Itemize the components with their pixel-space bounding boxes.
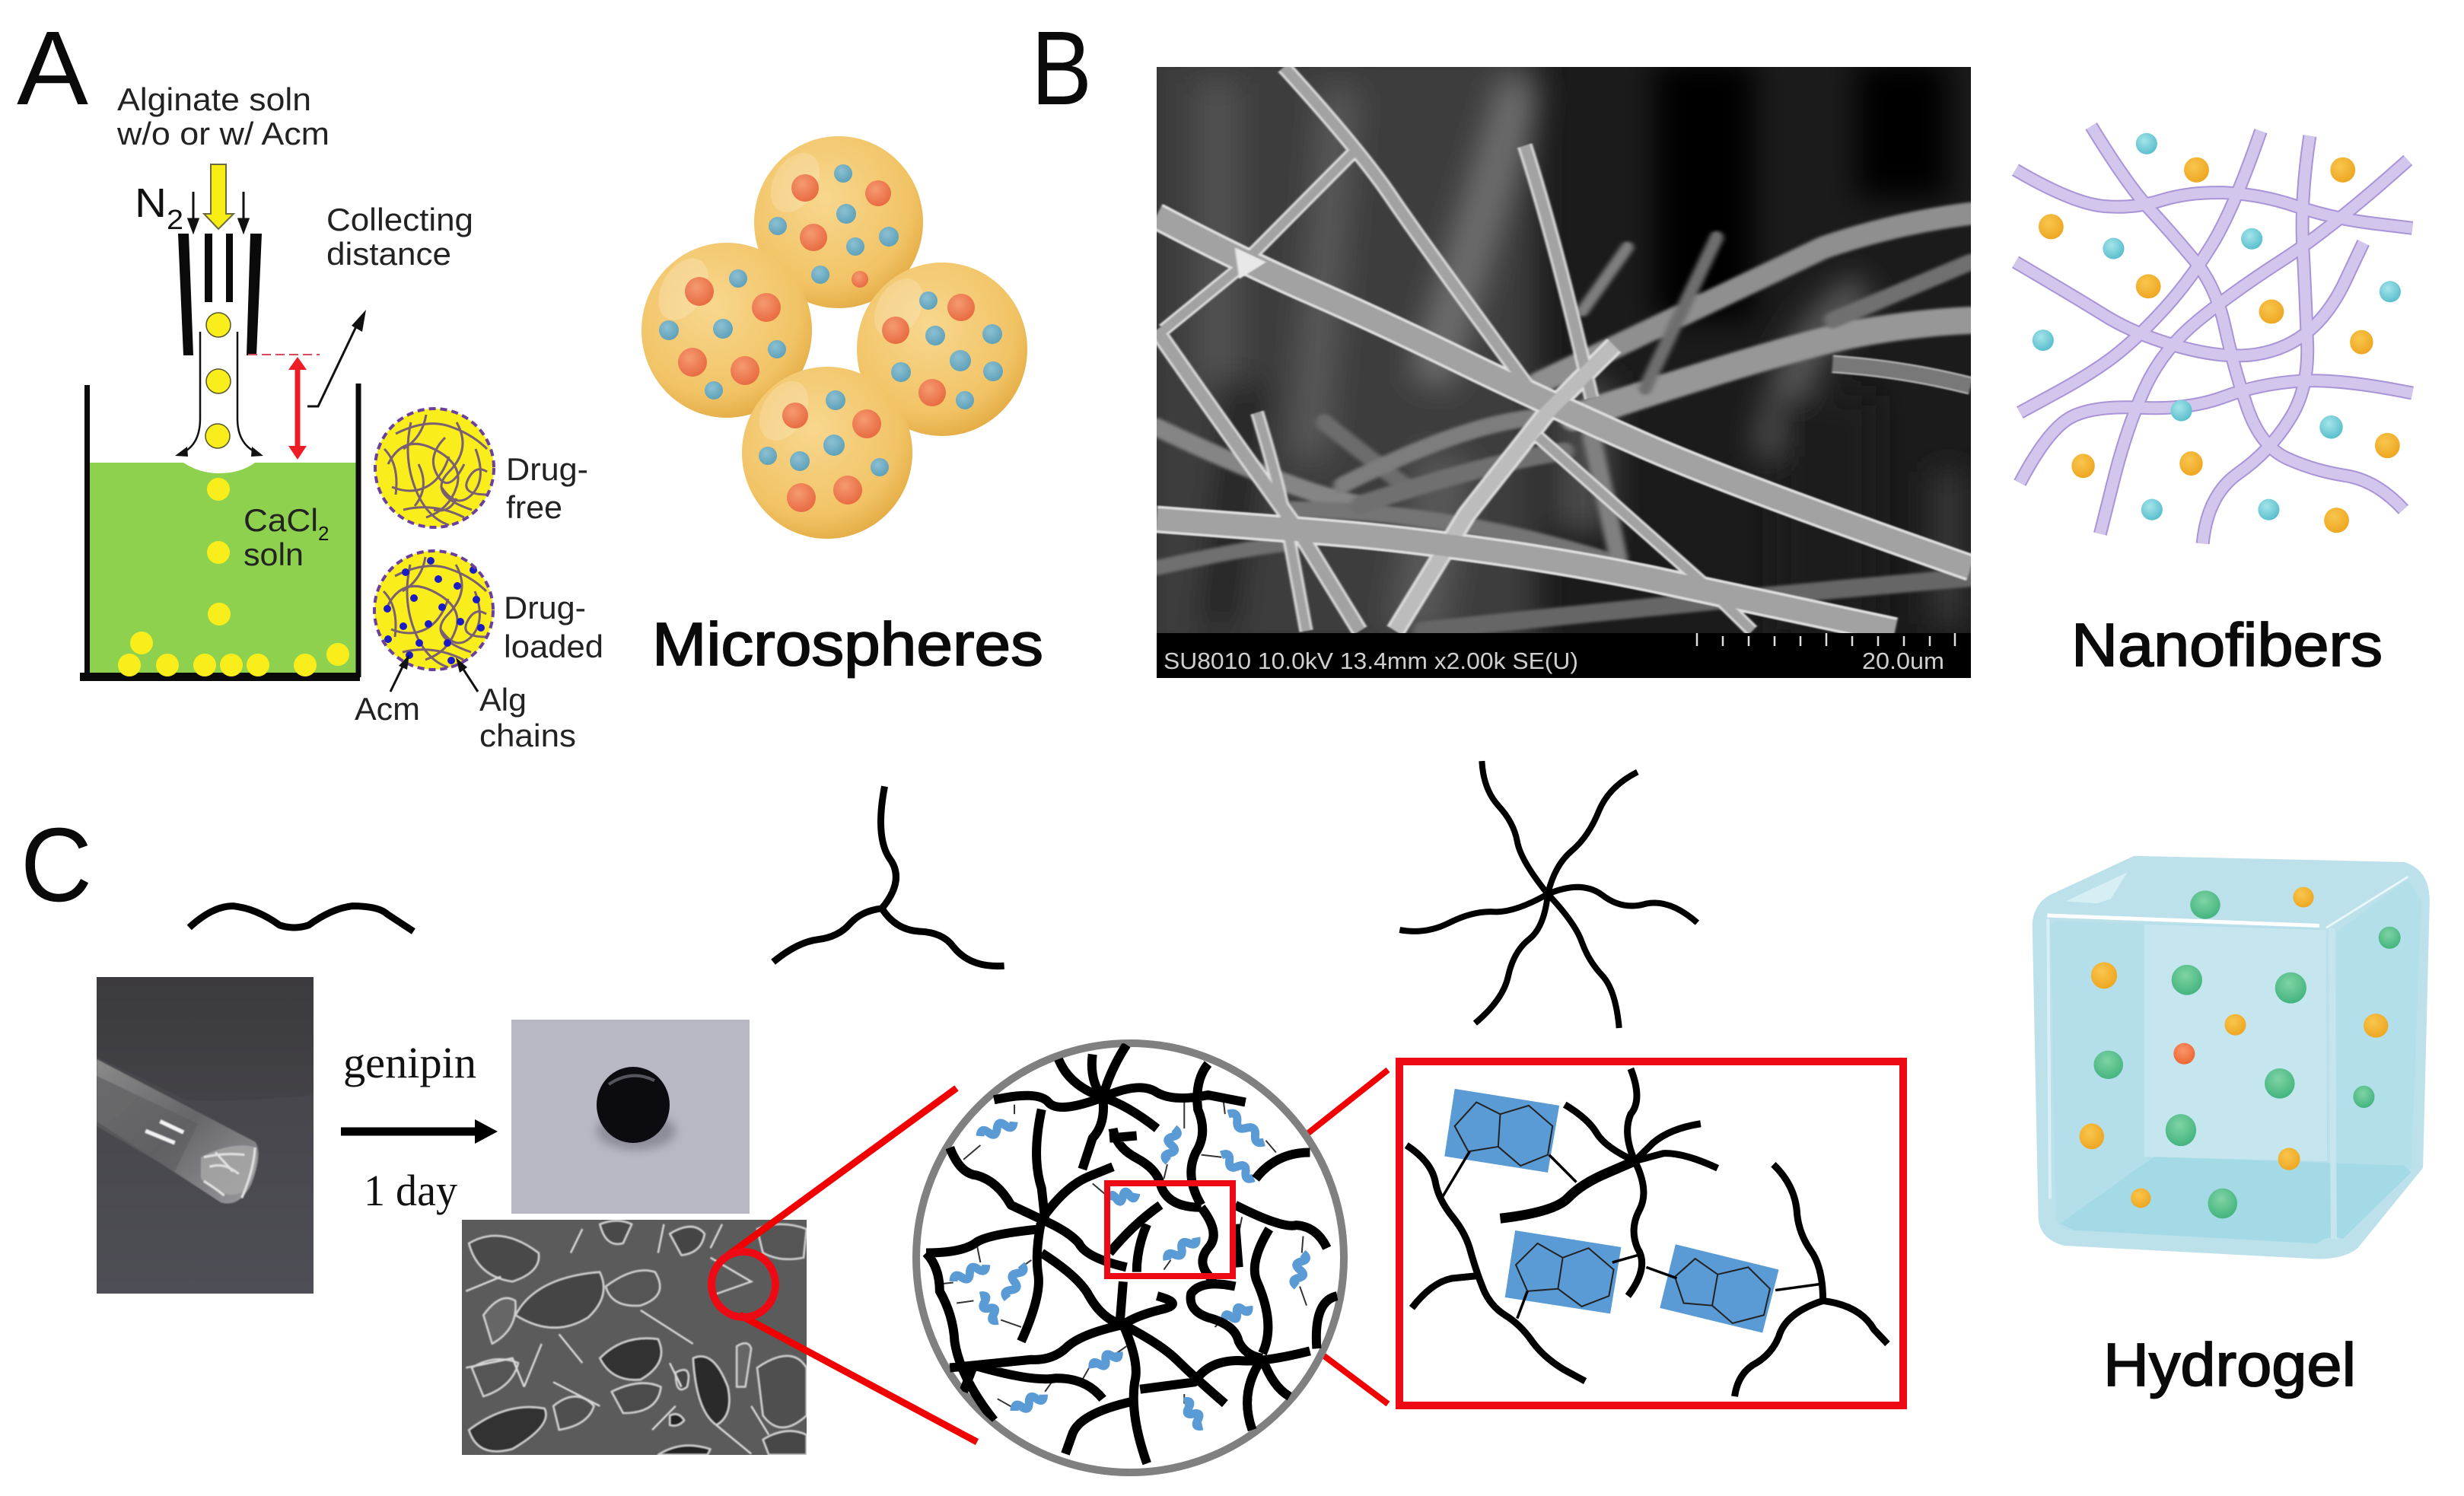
CaCl2 label: soln [244,536,304,572]
heading: Nanofibers: Nanofibers [2071,611,2383,679]
crosslinked polymer chains [926,1045,1337,1463]
red circle marker [712,1252,775,1317]
droplets in bath [118,478,349,676]
CaCl2 label: 2 [318,522,329,545]
reaction label: 1 day: 1 day [364,1166,457,1215]
CaCl2 label [244,502,329,572]
CaCl2 label: CaCl [244,502,318,538]
alginate solution label [116,81,329,151]
alginate solution label: Alginate soln [117,81,311,117]
detail box: crosslink close-up [1399,1062,1903,1405]
top sphere [754,136,923,308]
icon: linear chain [189,906,413,931]
drug-free label: free [506,489,562,525]
panel letter B: B [1031,10,1092,127]
nozzle [178,234,262,355]
N2 label: N [135,180,167,226]
drug-loaded label: loaded [504,629,603,664]
photo: dark gel bead [511,1020,750,1214]
panel letter C: C [21,807,92,924]
molecule 3 [1660,1244,1779,1333]
inset marker square [1107,1183,1233,1276]
crosslinks [1441,1151,1821,1319]
collecting distance label: Collecting [326,202,473,237]
alginate solution label: w/o or w/ Acm [116,116,329,151]
Acm label: Acm [355,691,420,727]
top face highlight [2066,872,2128,903]
drug-free label: Drug- [506,451,588,487]
drug squiggles [952,1111,1307,1428]
N2 label [135,180,183,235]
red double arrow [288,357,307,460]
air flow lines [175,332,263,457]
bottom sphere [742,367,912,539]
reaction label: genipin: genipin [343,1038,476,1087]
Alg chains label [479,682,576,753]
panel A: electrospray diagram [80,81,603,753]
edge highlights [2047,877,2408,1239]
network circle [916,1043,1344,1472]
heading: Hydrogel: Hydrogel [2103,1331,2356,1399]
panel C: polymer chain icons [189,761,1697,1028]
icon: six-arm chain [1399,761,1697,1028]
icon: drug-free sphere [375,409,494,527]
right sphere [857,263,1027,436]
nanofibers illustration [2015,126,2412,543]
Alg pointer [456,657,478,692]
icon: yellow feed arrow [204,164,234,229]
SEM micrograph of nanofibers [1141,46,1971,678]
Acm pointer [390,654,409,692]
collecting distance label: distance [326,236,451,272]
blurred background tones [1141,46,1948,654]
icon: drug-loaded sphere [374,551,493,670]
fibers [1157,67,1971,631]
drug-free label [506,451,588,525]
cube body [2033,856,2430,1259]
SEM info bar [1157,633,1971,678]
droplets [205,313,231,448]
fibers [2015,126,2412,543]
icon: three-arm chain [773,786,1004,966]
thin links [940,1097,1307,1408]
SEM info bar: 20.0um [1862,648,1944,674]
orange particles [2039,158,2400,533]
chains [1406,1068,1887,1396]
floor [2060,1157,2411,1243]
icon: nitrogen arrows [189,192,248,231]
SEM micrograph of hydrogel [462,1220,807,1455]
panel letter A: A [17,10,88,127]
drug-loaded label: Drug- [504,590,586,625]
hydrogel illustration [2033,856,2430,1259]
green particles [2093,890,2401,1218]
collecting distance label [326,202,473,272]
molecule 2 [1505,1230,1621,1313]
red particle [2173,1043,2195,1065]
molecule 1 [1444,1089,1559,1173]
beaker with CaCl2 solution [80,384,360,681]
Alg chains label: chains [479,718,576,753]
zoom lines from SEM to network [727,1088,977,1442]
Alg chains label: Alg [479,682,527,718]
microspheres illustration [641,136,1027,539]
out-of-focus fibers [1157,214,1971,631]
reaction arrow [341,1119,498,1144]
dashed reference line [248,354,320,355]
orange particles [2080,887,2388,1208]
left sphere [641,243,812,418]
heading: Microspheres: Microspheres [652,610,1043,678]
N2 label: 2 [167,204,183,235]
SEM info bar: SU8010 10.0kV 13.4mm x2.00k SE(U) [1164,648,1578,674]
collecting distance pointer [307,310,366,406]
teal particles [2033,133,2401,520]
photo: glass tube with solution [97,977,314,1294]
drug-loaded label [504,590,603,664]
zoom lines from network to detail box [1235,1070,1388,1404]
back and front faces [2051,879,2421,1243]
